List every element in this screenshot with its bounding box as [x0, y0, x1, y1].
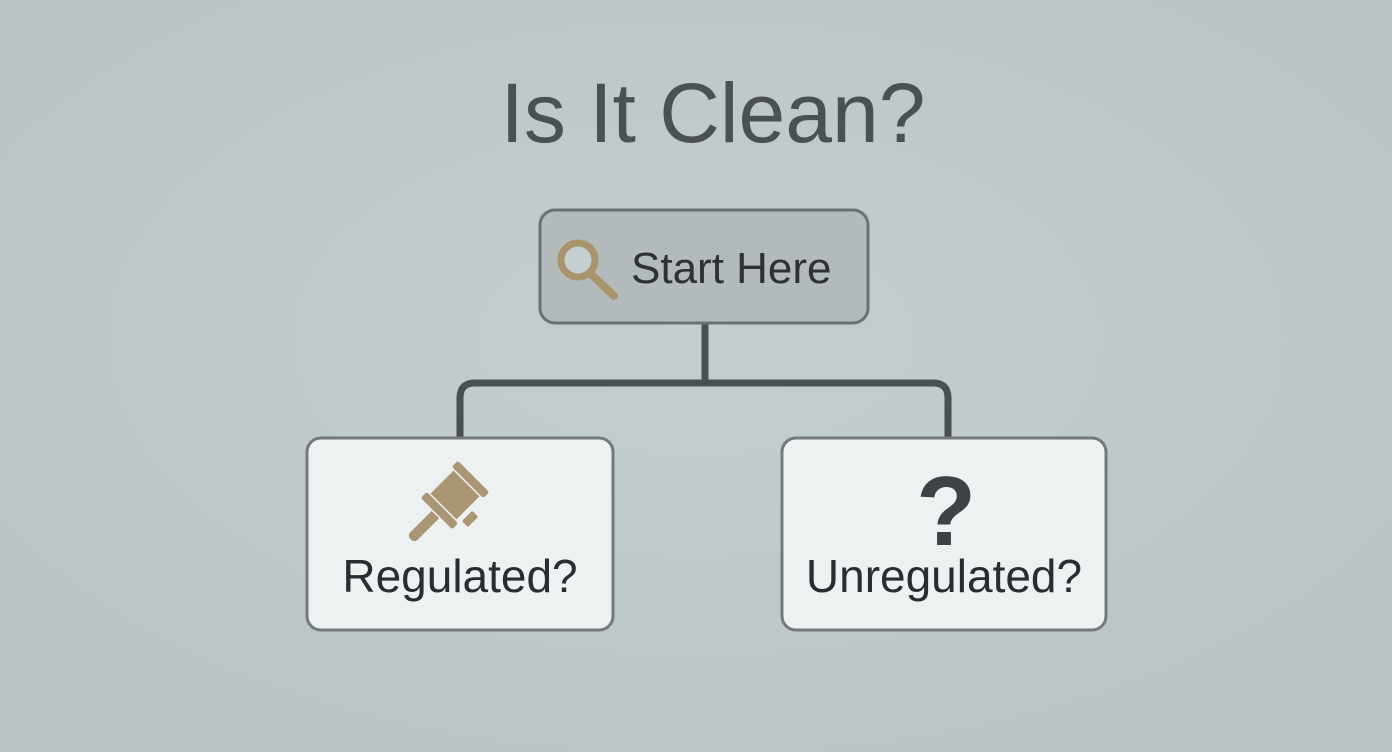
box: start here: Start Here: [631, 244, 832, 293]
icon: gavel: [406, 460, 490, 544]
icon: question mark: ?: [916, 456, 976, 566]
box: unregulated: Unregulated?: [806, 550, 1082, 602]
box: regulated: [307, 438, 613, 630]
box: start here: [540, 210, 868, 323]
title: Is It Clean?: [501, 66, 925, 160]
connector lines: [460, 323, 948, 437]
icon: magnifier: [561, 243, 614, 296]
box: unregulated: [782, 438, 1106, 630]
box: regulated: Regulated?: [342, 550, 578, 602]
